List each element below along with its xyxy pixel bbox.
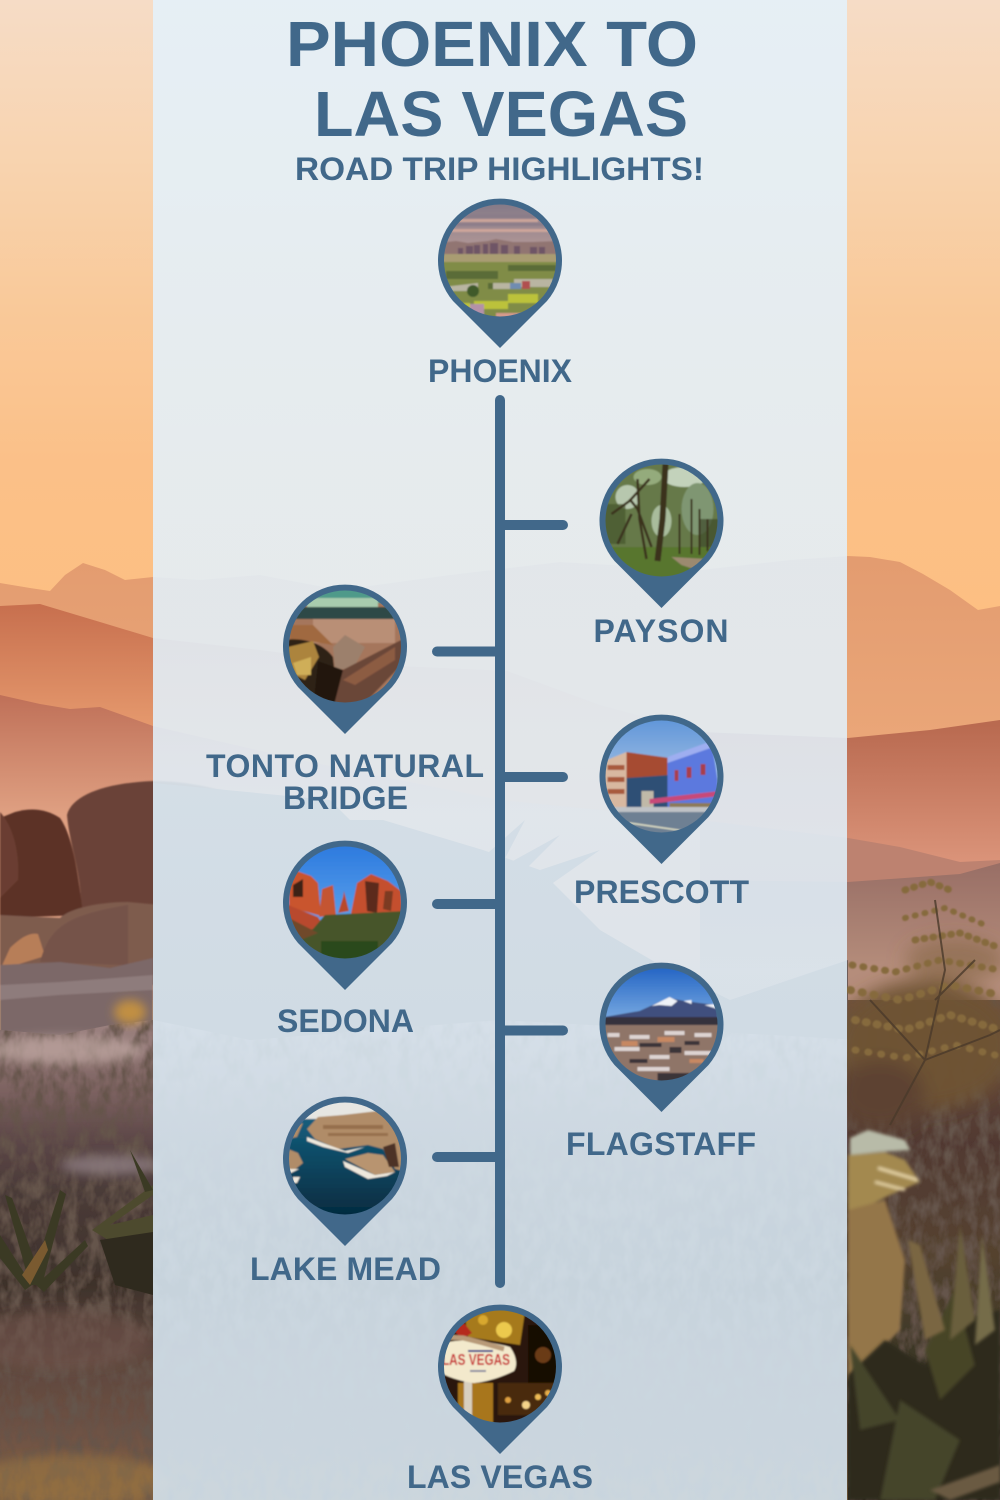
right side ground xyxy=(848,1000,1000,1500)
pin shape xyxy=(283,841,407,990)
far hill right xyxy=(700,863,1000,1050)
label: Prescott: PRESCOTT xyxy=(574,874,749,910)
label: Sedona: SEDONA xyxy=(277,1003,414,1039)
pin: Prescott xyxy=(600,715,724,864)
tree right xyxy=(835,882,1000,1130)
title xyxy=(286,8,704,187)
pin shape xyxy=(283,1097,407,1246)
branch to Prescott xyxy=(500,772,563,782)
pale grass highlights xyxy=(0,1000,170,1500)
vertical route line xyxy=(495,400,505,1283)
title line 2: LAS VEGAS xyxy=(314,78,688,150)
yucca right xyxy=(848,1225,1000,1500)
photo: Las Vegas sign xyxy=(444,1310,556,1422)
label: Payson: PAYSON xyxy=(594,613,728,649)
mound and yucca silhouette behind the panel xyxy=(153,783,848,1500)
pin: Tonto Natural Bridge xyxy=(283,585,407,734)
far mountain ridge xyxy=(0,556,1000,900)
label: Las Vegas: LAS VEGAS xyxy=(407,1459,593,1495)
sign text: LAS VEGAS xyxy=(442,1352,510,1369)
label line 2: BRIDGE xyxy=(283,780,408,816)
pin shape xyxy=(600,459,724,608)
pin shape xyxy=(438,1305,562,1454)
photo: Payson forest xyxy=(606,464,718,576)
branch to Payson xyxy=(500,520,563,530)
photo: Phoenix skyline xyxy=(444,204,556,316)
pin: Lake Mead xyxy=(283,1097,407,1246)
label: Tonto Natural Bridge xyxy=(206,748,484,816)
middle ridge left xyxy=(0,604,760,900)
yucca left xyxy=(0,1150,153,1295)
yucca blades behind the panel xyxy=(480,820,600,885)
photo: Lake Mead xyxy=(289,1102,401,1214)
label: Flagstaff: FLAGSTAFF xyxy=(566,1126,756,1162)
pin: Sedona xyxy=(283,841,407,990)
branch to Tonto Natural Bridge xyxy=(437,646,500,656)
pin: Las Vegas xyxy=(438,1305,562,1454)
pin shape xyxy=(283,585,407,734)
cactus right xyxy=(848,1130,920,1380)
photo: Sedona red rocks xyxy=(289,846,401,958)
branch to Sedona xyxy=(437,899,500,909)
photo: natural bridge xyxy=(289,590,401,702)
pin shape xyxy=(438,199,562,348)
label: Lake Mead: LAKE MEAD xyxy=(250,1251,441,1287)
boulders left xyxy=(0,781,280,1045)
branch to Flagstaff xyxy=(500,1026,563,1036)
pin shape xyxy=(600,715,724,864)
branch to Lake Mead xyxy=(437,1152,500,1162)
translucent center panel xyxy=(153,0,847,1500)
photo: Flagstaff and peaks xyxy=(606,968,718,1080)
label line 1: TONTO NATURAL xyxy=(206,748,484,784)
near ridge right xyxy=(700,820,1000,1000)
tree leaf clusters xyxy=(850,882,1000,1058)
near ridge left xyxy=(0,695,700,1000)
subtitle: ROAD TRIP HIGHLIGHTS! xyxy=(295,151,704,187)
photo: Prescott street xyxy=(606,720,718,832)
pin: Flagstaff xyxy=(600,963,724,1112)
pin shape xyxy=(600,963,724,1112)
title line 1: PHOENIX TO xyxy=(286,8,698,80)
middle ridge right xyxy=(700,720,1000,900)
pin: Payson xyxy=(600,459,724,608)
tree branches xyxy=(870,900,1000,1125)
timeline line and branches xyxy=(437,400,563,1283)
dry grass ground xyxy=(0,1020,860,1500)
label: Phoenix: PHOENIX xyxy=(428,353,573,389)
pin: Phoenix xyxy=(438,199,562,348)
tree canopy mass xyxy=(835,938,1000,1130)
